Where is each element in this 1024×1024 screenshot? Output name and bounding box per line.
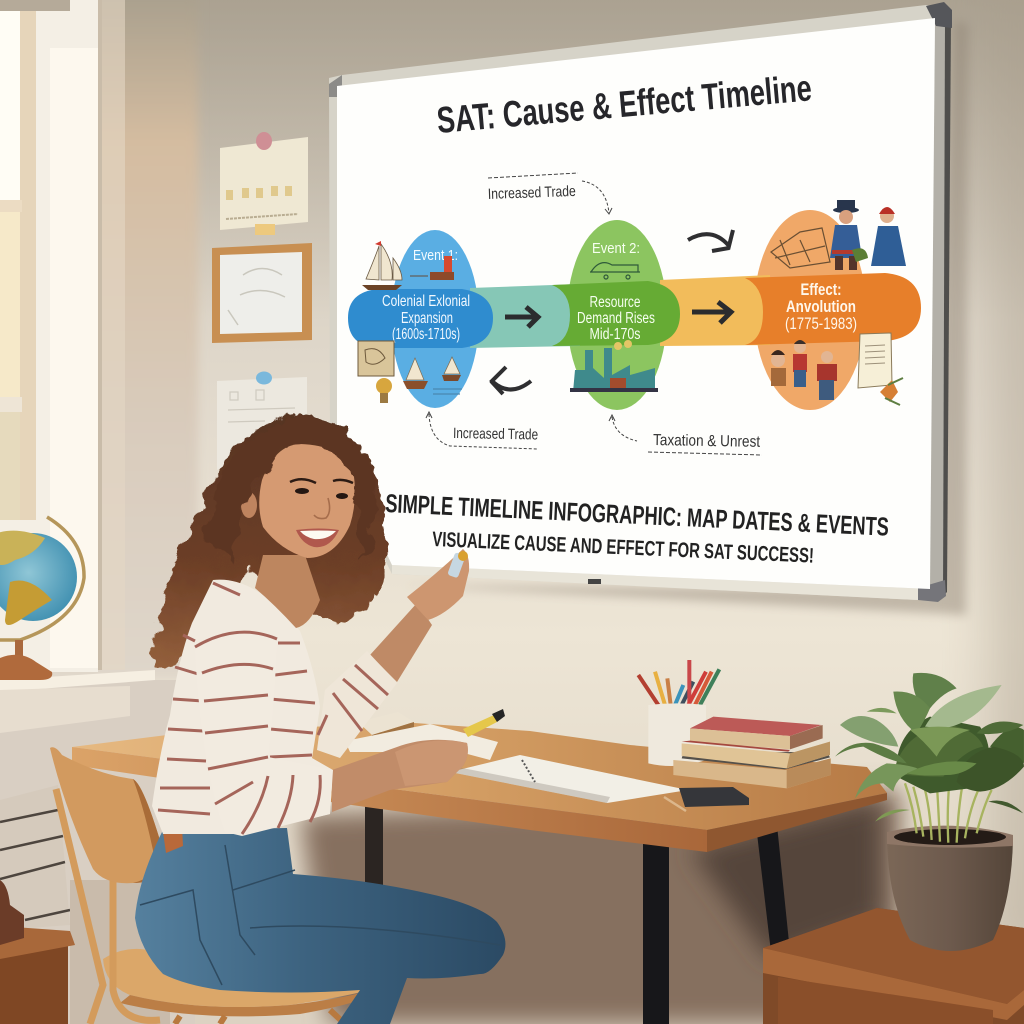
icon: sketch machinery — [590, 263, 640, 279]
arrow: right 1 — [505, 307, 538, 327]
student — [135, 416, 505, 1024]
chair back frame — [56, 789, 160, 1024]
wall frame: sketch — [212, 243, 312, 343]
belt — [163, 826, 183, 853]
whiteboard surface — [337, 18, 935, 589]
book stack — [673, 717, 831, 788]
whiteboard — [329, 2, 952, 602]
arrow: curved bottom — [491, 367, 531, 394]
neck — [255, 555, 320, 628]
wall note: paper with pin — [217, 372, 307, 470]
segment: blue — [348, 289, 493, 348]
event 2 label: Demand Rises — [577, 310, 655, 327]
hair front — [205, 416, 375, 560]
effect label: Anvolution — [786, 297, 856, 316]
event 2 label: Resource — [590, 294, 640, 311]
collar stripes and torso stripes — [158, 583, 315, 814]
icon: three figures — [771, 340, 837, 400]
side table with keepsake — [0, 880, 75, 1024]
open notebook — [450, 755, 688, 803]
effect label: Effect: — [800, 280, 842, 299]
arrow: curved top — [688, 230, 733, 251]
pencil cup — [638, 660, 719, 766]
annotation: increased trade top — [488, 173, 612, 214]
event 1 label — [382, 293, 470, 343]
chair back — [50, 747, 168, 883]
event 2 label — [577, 294, 655, 343]
face — [259, 444, 355, 558]
annotation: taxation and unrest — [609, 415, 762, 455]
icon: map — [358, 341, 394, 376]
window — [0, 0, 198, 680]
event 1 icons — [358, 241, 462, 403]
effect circle — [754, 210, 866, 410]
event 1 label: Expansion — [401, 310, 453, 327]
annotation: increased trade top: Increased Trade — [488, 183, 576, 203]
wall note: sticky paper with pin — [220, 132, 308, 235]
desk legs — [365, 805, 790, 1024]
hair back — [155, 416, 389, 668]
event 1 label: (1600s-1710s) — [392, 326, 460, 343]
event 2 circle: Event 2: — [592, 240, 640, 257]
under desk shadow — [300, 790, 900, 1024]
segment: green — [552, 281, 680, 346]
effect label — [785, 280, 857, 333]
event 1 circle: Event 1: — [413, 247, 458, 264]
icon: compass — [376, 378, 392, 403]
eyes and brows — [290, 479, 353, 499]
phone — [679, 787, 749, 807]
effect label: (1775-1983) — [785, 314, 857, 333]
ear — [241, 492, 257, 518]
near arm — [195, 631, 505, 836]
segment: teal — [470, 284, 580, 348]
annotation: increased trade bottom — [426, 412, 538, 449]
window sill and radiator — [0, 670, 195, 1024]
small pencil on desk — [664, 797, 686, 811]
icon: tall ship — [362, 241, 402, 290]
icon: boats — [410, 256, 454, 280]
smile — [296, 528, 339, 547]
effect icons — [771, 200, 906, 405]
whiteboard frame — [329, 5, 948, 600]
timeline bar — [348, 273, 921, 348]
chair seat — [103, 949, 403, 1007]
plant leaves — [835, 673, 1024, 843]
annotation: taxation and unrest: Taxation & Unrest — [653, 432, 761, 451]
event 1 circle — [391, 230, 479, 408]
event 2 icons — [570, 263, 658, 392]
chair — [50, 747, 403, 1024]
icon: colonial men — [830, 200, 906, 270]
icon: globe — [0, 517, 84, 680]
icon: ships — [403, 357, 462, 394]
arrow: right 2 — [692, 302, 731, 323]
icon: declaration scroll — [858, 333, 903, 405]
shirt raised sleeve — [317, 651, 397, 758]
event 2 circle — [567, 220, 667, 410]
shirt torso — [152, 580, 333, 834]
plant pot — [887, 826, 1013, 951]
nose — [314, 498, 330, 519]
annotation: increased trade bottom: Increased Trade — [453, 425, 538, 443]
items on desk — [345, 660, 831, 811]
jeans — [135, 828, 505, 1024]
subheading text: VISUALIZE CAUSE AND EFFECT FOR SAT SUCCESS! — [432, 528, 814, 568]
desk — [72, 722, 887, 852]
event 1 label: Colenial Exlonial — [382, 293, 470, 310]
stacked notebooks — [358, 712, 414, 740]
segment: orange — [745, 273, 921, 345]
event 2 label: Mid-170s — [590, 326, 641, 343]
icon: factory — [570, 340, 658, 392]
jeans seams — [140, 845, 500, 985]
far arm and hand raised — [370, 549, 469, 682]
segment: yellow — [660, 275, 770, 346]
icon: sketch map — [771, 228, 830, 268]
title: SAT: Cause & Effect Timeline — [435, 67, 813, 141]
open paper — [345, 724, 498, 760]
cabinet — [763, 908, 1024, 1024]
